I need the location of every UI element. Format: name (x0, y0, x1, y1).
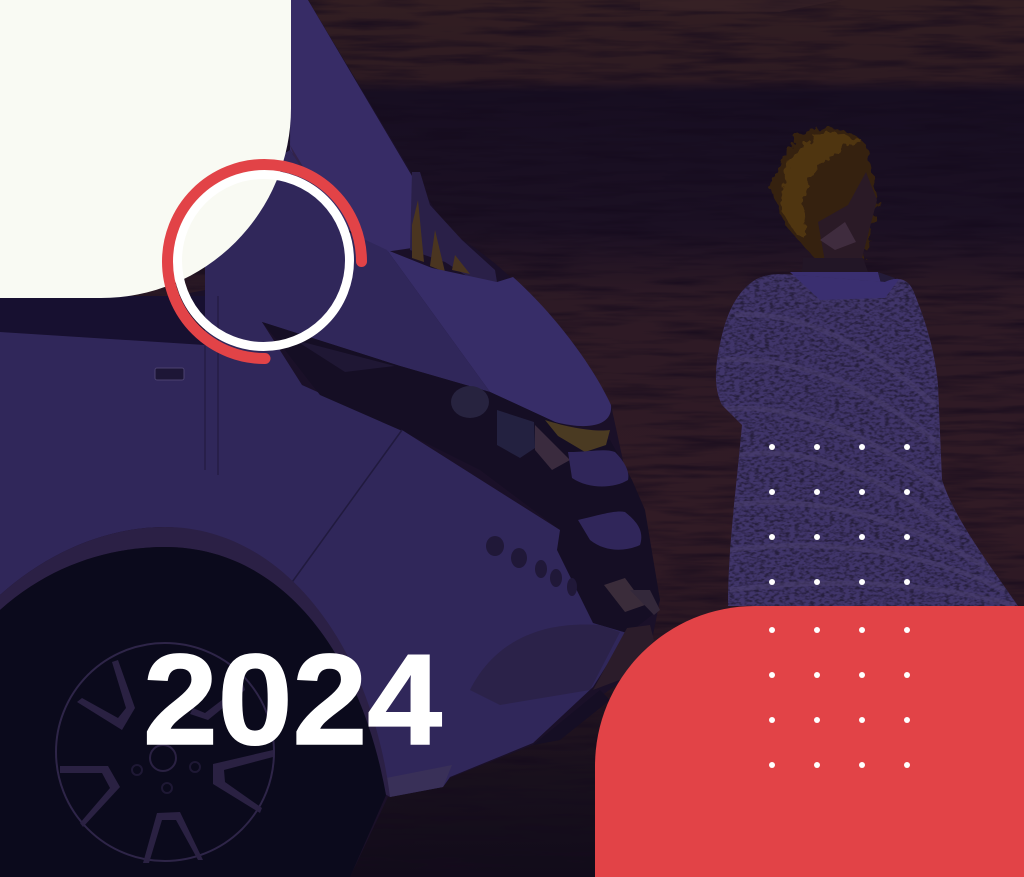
headlight cluster (262, 322, 660, 640)
icon: white ring (178, 174, 350, 346)
door handle (155, 368, 184, 380)
dot grid: upper (769, 444, 910, 585)
wheel rim and spokes (56, 643, 274, 863)
title: year: 2024 (143, 628, 442, 772)
fender dimples (486, 536, 577, 596)
headscarf (818, 172, 877, 262)
windscreen pillar (290, 0, 412, 252)
lower bumper (290, 430, 627, 797)
icon: red progress arc (167, 165, 362, 359)
dark window strip (0, 296, 205, 345)
tire (0, 547, 386, 877)
hair (772, 128, 878, 262)
panel: cream corner shape (0, 0, 291, 298)
hood (387, 250, 611, 426)
white top (790, 272, 885, 300)
photo: camper van (0, 0, 660, 877)
bumper chrome lips (545, 420, 610, 452)
blanket (716, 274, 1018, 606)
panel: red corner shape (595, 606, 1024, 877)
photo: woman wrapped in a blanket (700, 128, 1024, 610)
wheel arch trim (0, 527, 390, 797)
neck (802, 258, 868, 272)
door panel (0, 150, 490, 595)
van silhouette: shadowed base (0, 0, 660, 877)
dot grid: lower (769, 627, 910, 768)
wiper and reflections (410, 172, 497, 282)
